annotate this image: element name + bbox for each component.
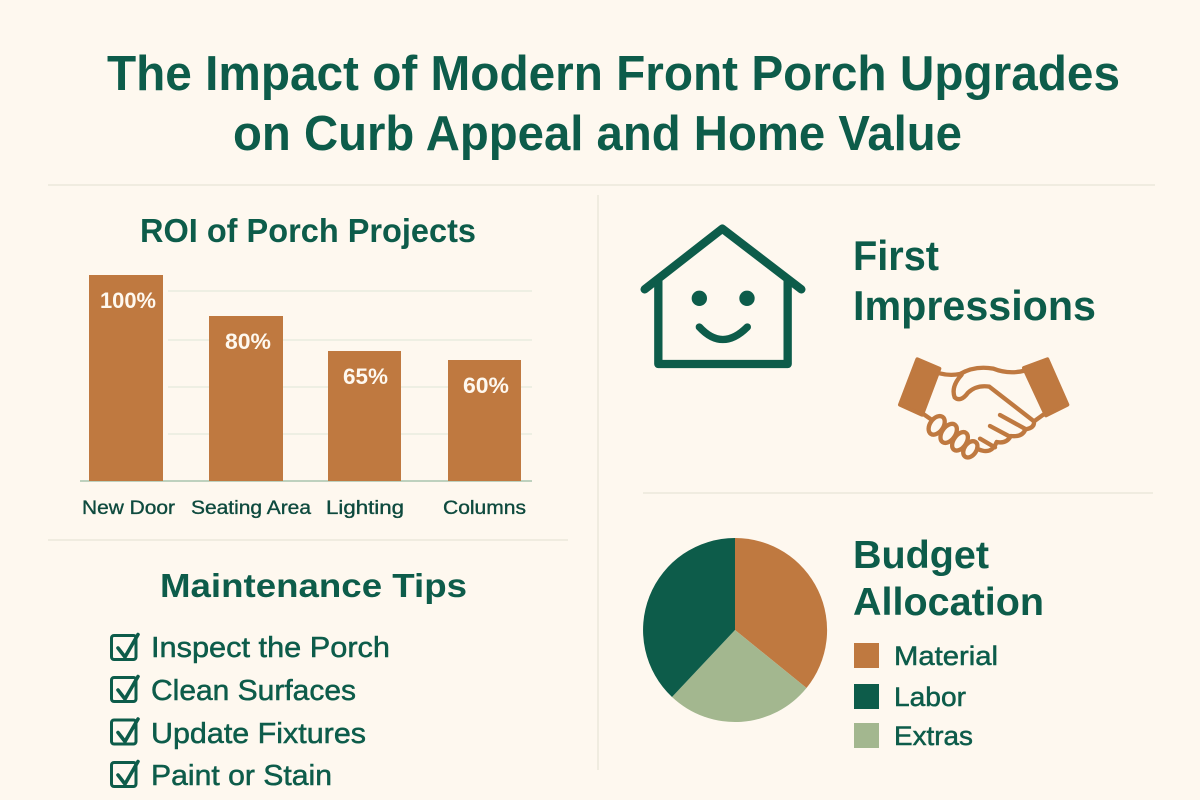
- heading: First Impressions: Impressions: [853, 282, 1096, 329]
- title: The Impact of Modern Front Porch Upgrades: [107, 47, 1120, 101]
- panel: ROI of porch projects: [80, 212, 532, 519]
- legend: Material: [894, 641, 998, 671]
- bar chart: 80%: [225, 329, 271, 354]
- bar chart: 100%: [100, 288, 156, 313]
- bar chart: Seating Area: [191, 498, 311, 519]
- icon: handshake: [900, 359, 1067, 460]
- panel: first impressions: [645, 229, 1096, 460]
- title: on Curb Appeal and Home Value: [233, 107, 962, 161]
- legend: Labor: [894, 682, 966, 712]
- heading: First Impressions: First: [853, 232, 939, 279]
- checklist item: Inspect the Porch: Inspect the Porch: [151, 632, 390, 664]
- heading: First Impressions: [853, 232, 1096, 329]
- panel: budget allocation: [643, 534, 1044, 751]
- icon: smiling house: [645, 229, 801, 364]
- heading: Budget Allocation: [853, 534, 1044, 624]
- heading: Maintenance Tips: Maintenance Tips: [160, 567, 467, 604]
- panel: maintenance tips: [112, 567, 467, 792]
- title: [107, 47, 1120, 161]
- legend: [854, 641, 998, 751]
- checklist item: Clean Surfaces: Clean Surfaces: [151, 675, 356, 707]
- checklist item: Update Fixtures: Update Fixtures: [151, 718, 366, 750]
- bar chart: 60%: [463, 373, 509, 398]
- bar chart: [80, 275, 532, 519]
- heading: ROI of Porch Projects: ROI of Porch Projects: [140, 212, 476, 249]
- heading: Budget Allocation: Allocation: [853, 581, 1044, 624]
- pie chart: [643, 538, 827, 722]
- bar chart: 65%: [343, 364, 388, 389]
- bar chart: New Door: [82, 498, 176, 519]
- bar chart: Lighting: [326, 498, 404, 519]
- heading: Budget Allocation: Budget: [853, 534, 989, 577]
- checklist item: Paint or Stain: Paint or Stain: [151, 760, 332, 792]
- legend: Extras: [894, 721, 973, 751]
- bar chart: Columns: [443, 498, 526, 519]
